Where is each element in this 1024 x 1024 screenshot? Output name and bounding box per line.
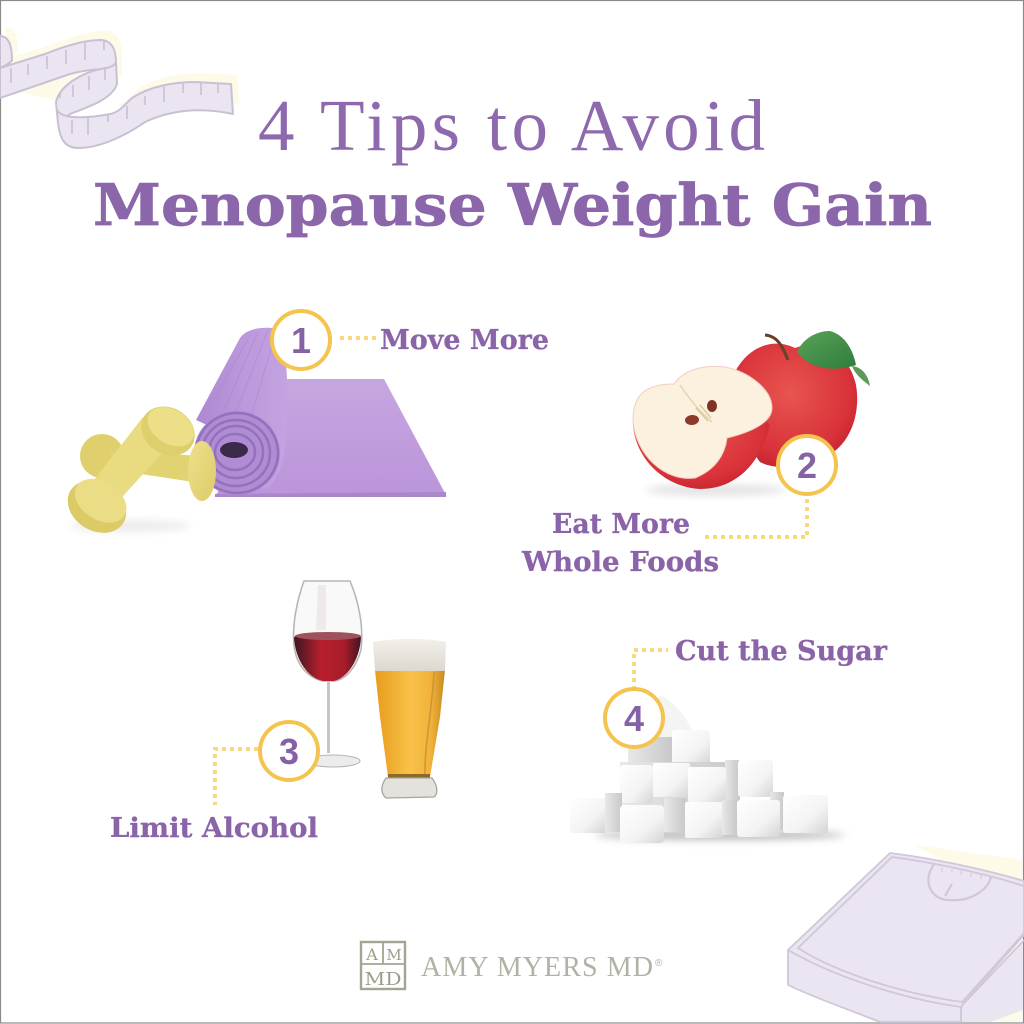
title bbox=[93, 85, 932, 239]
tip 1: move more bbox=[58, 311, 549, 543]
logo mark bbox=[361, 942, 405, 990]
badge 2: 2 bbox=[797, 445, 817, 486]
badge 2 bbox=[778, 436, 836, 494]
registered mark: ® bbox=[655, 958, 663, 969]
tip 3: limit alcohol bbox=[110, 581, 446, 844]
title line 2: Menopause Weight Gain bbox=[93, 172, 932, 239]
label: eat more whole foods: Eat More bbox=[552, 509, 690, 540]
badge 4: 4 bbox=[624, 698, 644, 739]
logo mark: A bbox=[365, 945, 378, 964]
icon: wine glass bbox=[294, 581, 362, 767]
tip 2: whole foods bbox=[521, 331, 870, 578]
badge 4 bbox=[605, 689, 663, 747]
badge 3 bbox=[260, 722, 318, 780]
connector 4 bbox=[634, 650, 668, 690]
illustration: measuring tape bbox=[0, 27, 239, 148]
title line 1: 4 Tips to Avoid bbox=[258, 85, 765, 166]
label: limit alcohol: Limit Alcohol bbox=[110, 813, 318, 844]
label: eat more whole foods bbox=[521, 509, 719, 578]
connector 2 bbox=[705, 497, 807, 537]
icon: apples bbox=[633, 331, 870, 496]
badge 1: 1 bbox=[291, 320, 311, 361]
logo wordmark: AMY MYERS MD bbox=[421, 952, 653, 983]
badge 3: 3 bbox=[279, 731, 299, 772]
tip 4: cut the sugar bbox=[570, 636, 888, 843]
connector 1 bbox=[340, 336, 376, 340]
connector 3 bbox=[215, 749, 258, 805]
icon: sugar cubes bbox=[570, 695, 845, 843]
logo mark: MD bbox=[364, 969, 402, 990]
badge 1 bbox=[272, 311, 330, 369]
illustration: weighing scale bbox=[788, 845, 1024, 1022]
label: cut the sugar: Cut the Sugar bbox=[675, 636, 888, 667]
icon: yoga mat bbox=[194, 328, 446, 497]
logo bbox=[361, 942, 663, 990]
label: move more: Move More bbox=[380, 325, 549, 356]
icon: beer glass bbox=[373, 639, 446, 798]
label: eat more whole foods: Whole Foods bbox=[521, 547, 719, 578]
icon: dumbbells bbox=[58, 397, 216, 543]
logo mark: M bbox=[386, 946, 402, 964]
